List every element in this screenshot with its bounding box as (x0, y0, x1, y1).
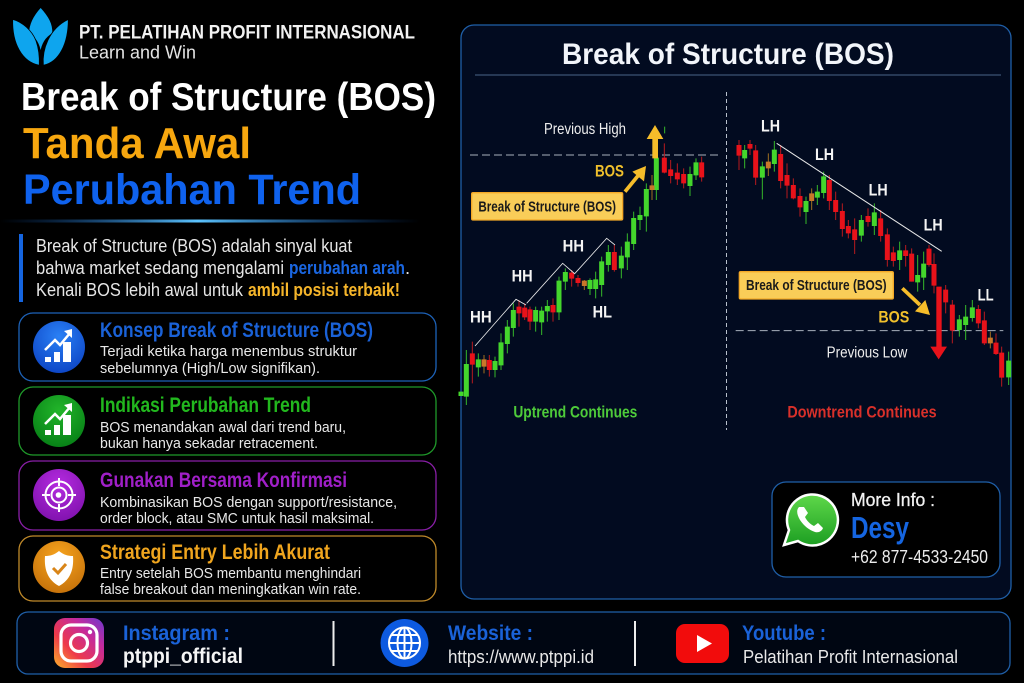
caption: downtrend: Downtrend Continues (787, 403, 937, 421)
main title (21, 76, 436, 214)
panel: indikasi: Indikasi Perubahan Trend (100, 394, 311, 417)
instagram text (123, 621, 243, 668)
label: previous high: Previous High (544, 121, 626, 138)
intro text block: . (405, 257, 410, 278)
panel: konsep: Terjadi ketika harga menembus struktur (100, 343, 357, 360)
icon: whatsapp (784, 494, 838, 545)
youtube text (742, 621, 958, 667)
contact box: More Info : (851, 490, 935, 510)
swing labels: HH (563, 237, 584, 256)
panel: konsep (19, 313, 436, 381)
website text (448, 621, 594, 667)
tagline: Learn and Win (79, 42, 196, 62)
intro text block (19, 234, 410, 302)
swing labels: HL (593, 302, 612, 321)
swing labels down (761, 117, 994, 305)
icon: globe (380, 619, 428, 667)
swing labels: HH (512, 267, 533, 286)
logo: lotus (13, 7, 68, 65)
website text: Website : (448, 621, 533, 645)
callout: break of structure down (739, 272, 893, 299)
swing labels down: LH (761, 117, 780, 136)
panel: konsep: sebelumnya (High/Low signifikan). (100, 360, 320, 377)
panel: strategi: false breakout dan meningkatkan win rate. (100, 581, 361, 598)
panel: konsep: Konsep Break of Structure (BOS) (100, 319, 373, 342)
swing labels: HH (470, 307, 492, 326)
panel: konfirmasi: order block, atau SMC untuk hasil maksimal. (100, 510, 374, 527)
contact box: +62 877-4533-2450 (851, 547, 988, 567)
company name: PT. PELATIHAN PROFIT INTERNASIONAL (79, 22, 415, 44)
swing labels down: LH (815, 145, 834, 164)
callout: break of structure: Break of Structure (BOS) (478, 200, 616, 216)
swing labels (470, 237, 612, 326)
icon: instagram (54, 618, 104, 668)
swing labels down: LH (924, 216, 943, 235)
contact box (772, 482, 1000, 577)
callout: break of structure down: Break of Structure (BOS) (746, 278, 887, 294)
panel: konfirmasi: Kombinasikan BOS dengan support/resistance, (100, 494, 397, 511)
main title: Break of Structure (BOS) (21, 76, 436, 119)
youtube text: Pelatihan Profit Internasional (743, 647, 958, 667)
swing labels down: LH (869, 180, 888, 199)
chart heading: Break of Structure (BOS) (562, 38, 894, 71)
icon: youtube (676, 624, 729, 663)
label: BOS down: BOS (878, 307, 909, 326)
intro text block: perubahan arah (289, 257, 405, 278)
social bar (17, 612, 1010, 674)
chart: downtrend (736, 117, 1009, 421)
swing labels down: LL (978, 286, 994, 305)
panel: konfirmasi: Gunakan Bersama Konfirmasi (100, 469, 347, 492)
main title: Tanda Awal (23, 119, 251, 168)
intro text block: ambil posisi terbaik! (248, 279, 400, 300)
intro text block: Kenali BOS lebih awal untuk (36, 279, 244, 300)
panel: strategi: Strategi Entry Lebih Akurat (100, 541, 330, 564)
panel: strategi (19, 536, 436, 601)
panel: strategi: Entry setelah BOS membantu menghindari (100, 565, 361, 582)
website text: https://www.ptppi.id (448, 647, 594, 667)
intro text block: Break of Structure (BOS) adalah sinyal kuat (36, 235, 352, 256)
main title: Perubahan Trend (23, 166, 361, 214)
panel: chart (461, 25, 1011, 599)
caption: uptrend: Uptrend Continues (513, 403, 637, 421)
panel: indikasi: bukan hanya sekadar retracement. (100, 435, 318, 452)
instagram text: Instagram : (123, 621, 230, 645)
callout: break of structure (472, 193, 623, 220)
panel: indikasi (19, 387, 436, 455)
panel: indikasi: BOS menandakan awal dari trend baru, (100, 419, 346, 436)
intro text block: bahwa market sedang mengalami (36, 257, 284, 278)
label: BOS: BOS (595, 162, 624, 181)
instagram text: ptppi_official (123, 644, 243, 668)
label: previous low: Previous Low (827, 345, 908, 362)
chart: uptrend (461, 121, 718, 421)
youtube text: Youtube : (742, 621, 826, 645)
contact box: Desy (851, 510, 910, 545)
panel: konfirmasi (19, 461, 436, 530)
